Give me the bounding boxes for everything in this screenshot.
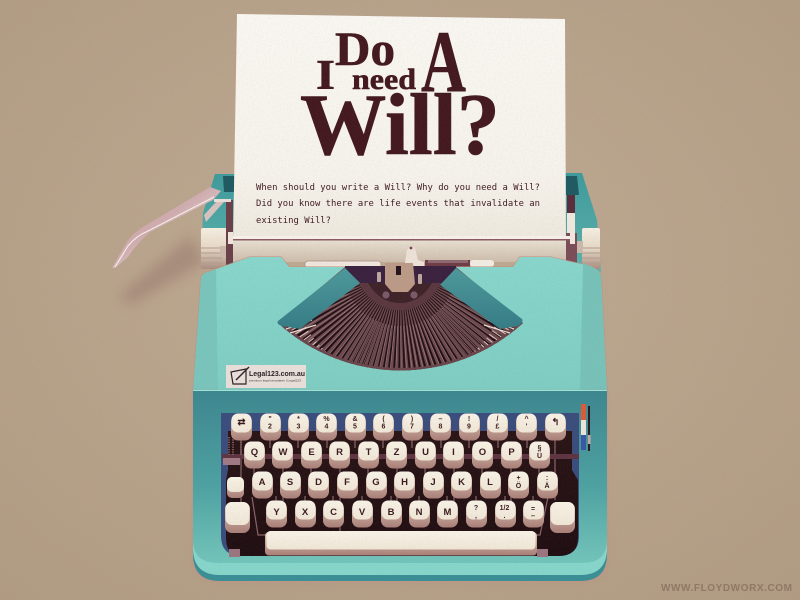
number key row: & — [352, 416, 358, 423]
YXCV key row: 1/2 — [500, 505, 509, 512]
QWERTZ key row: Q — [251, 447, 258, 458]
number key row: 3 — [297, 424, 301, 430]
number key row: * — [297, 416, 300, 423]
paper release lever — [112, 187, 221, 268]
YXCV key row: B — [388, 507, 395, 518]
number key row: ' — [526, 424, 528, 430]
intro text: Did you know there are life events that invalidate an — [256, 199, 540, 209]
number key row: 5 — [353, 424, 357, 430]
title: Do I need a Will?: need — [352, 63, 416, 96]
paper rail and platen — [228, 232, 575, 262]
YXCV key row: M — [444, 507, 452, 518]
number key row — [231, 414, 566, 440]
number key row: / — [497, 416, 499, 423]
ASDF key row: K — [458, 477, 465, 488]
QWERTZ key row: U — [422, 447, 429, 458]
Legal123 logo label — [226, 365, 306, 388]
type bars fan — [281, 285, 523, 370]
ASDF key row: Ä — [544, 482, 550, 490]
YXCV key row: = — [531, 506, 535, 513]
ASDF key row: G — [372, 477, 380, 488]
ASDF key row: S — [287, 477, 293, 488]
carriage levers — [305, 246, 494, 268]
number key row: 2 — [268, 424, 272, 430]
intro text: existing Will? — [256, 216, 331, 226]
QWERTZ key row: T — [366, 447, 372, 458]
QWERTZ key row: Z — [394, 447, 400, 458]
paper carriage back shell — [201, 173, 601, 272]
title: Do I need a Will?: Will? — [300, 77, 500, 174]
space bar — [265, 531, 537, 556]
right flap — [440, 268, 522, 329]
QWERTZ key row: W — [279, 447, 288, 458]
ASDF key row: A — [259, 477, 266, 488]
YXCV key row: – — [531, 513, 535, 520]
QWERTZ key row — [244, 442, 550, 468]
typewriter shadow — [120, 236, 205, 305]
lower body of typewriter — [192, 390, 608, 582]
number key row: 9 — [467, 424, 471, 430]
ASDF key row: D — [315, 477, 322, 488]
QWERTZ key row: O — [479, 447, 486, 458]
number key row: 7 — [410, 424, 414, 430]
title: Do I need a Will?: Do — [335, 23, 395, 76]
segment hub — [345, 263, 456, 310]
number key row: ⇄ — [238, 417, 247, 428]
QWERTZ key row: E — [308, 447, 315, 458]
left flap — [278, 268, 360, 329]
YXCV key row: V — [359, 507, 366, 518]
ASDF key row — [252, 472, 558, 498]
title: Do I need a Will? — [300, 14, 500, 174]
YXCV key row: . — [504, 513, 506, 520]
number key row: ↰ — [552, 417, 559, 428]
intro text — [256, 183, 540, 226]
ASDF key row: + — [516, 475, 521, 482]
number key row: ^ — [524, 415, 529, 423]
left platen knob — [201, 199, 233, 269]
Legal123 logo label: premium legal templates | Legal123 — [249, 378, 302, 382]
modifier keys — [225, 477, 575, 533]
ASDF key row: J — [430, 477, 436, 488]
ASDF key row: F — [344, 477, 350, 488]
number key row: £ — [496, 424, 500, 430]
number key row: 6 — [382, 424, 386, 430]
key stems — [241, 436, 555, 535]
QWERTZ key row: R — [336, 447, 343, 458]
QWERTZ key row: I — [452, 447, 455, 458]
QWERTZ key row: § — [538, 445, 542, 452]
number key row: 8 — [439, 424, 443, 430]
number key row: – — [439, 416, 443, 423]
number key row: % — [323, 416, 330, 423]
upper body of typewriter — [193, 257, 607, 392]
sheet of paper — [233, 14, 566, 245]
ASDF key row: H — [401, 477, 408, 488]
ASDF key row: L — [487, 477, 493, 488]
right platen knob — [566, 228, 600, 269]
colour stripes indicator — [581, 404, 591, 451]
ASDF key row: Ö — [516, 481, 522, 490]
type basket opening — [278, 263, 523, 370]
number key row: ( — [382, 416, 385, 423]
Legal123 logo label: Legal123.com.au — [249, 369, 305, 378]
number key row: ) — [411, 416, 413, 423]
title: Do I need a Will?: A — [421, 14, 466, 111]
YXCV key row: C — [330, 507, 337, 518]
keyboard well — [221, 413, 579, 557]
number key row: 4 — [325, 424, 329, 430]
QWERTZ key row: Ü — [537, 451, 542, 460]
QWERTZ key row: P — [508, 447, 515, 458]
YXCV key row: Y — [273, 507, 280, 518]
YXCV key row: X — [302, 507, 309, 518]
number key row: " — [268, 416, 272, 423]
intro text: When should you write a Will? Why do you need a Will? — [256, 183, 540, 193]
number key row: ! — [468, 416, 470, 423]
YXCV key row: ? — [474, 505, 478, 512]
YXCV key row: , — [475, 513, 477, 520]
YXCV key row: N — [416, 507, 423, 518]
watermark: www.floydworx.com: WWW.FLOYDWORX.COM — [661, 583, 792, 594]
ASDF key row: : — [546, 475, 548, 482]
YXCV key row — [266, 500, 544, 528]
title: Do I need a Will?: I — [316, 53, 335, 99]
